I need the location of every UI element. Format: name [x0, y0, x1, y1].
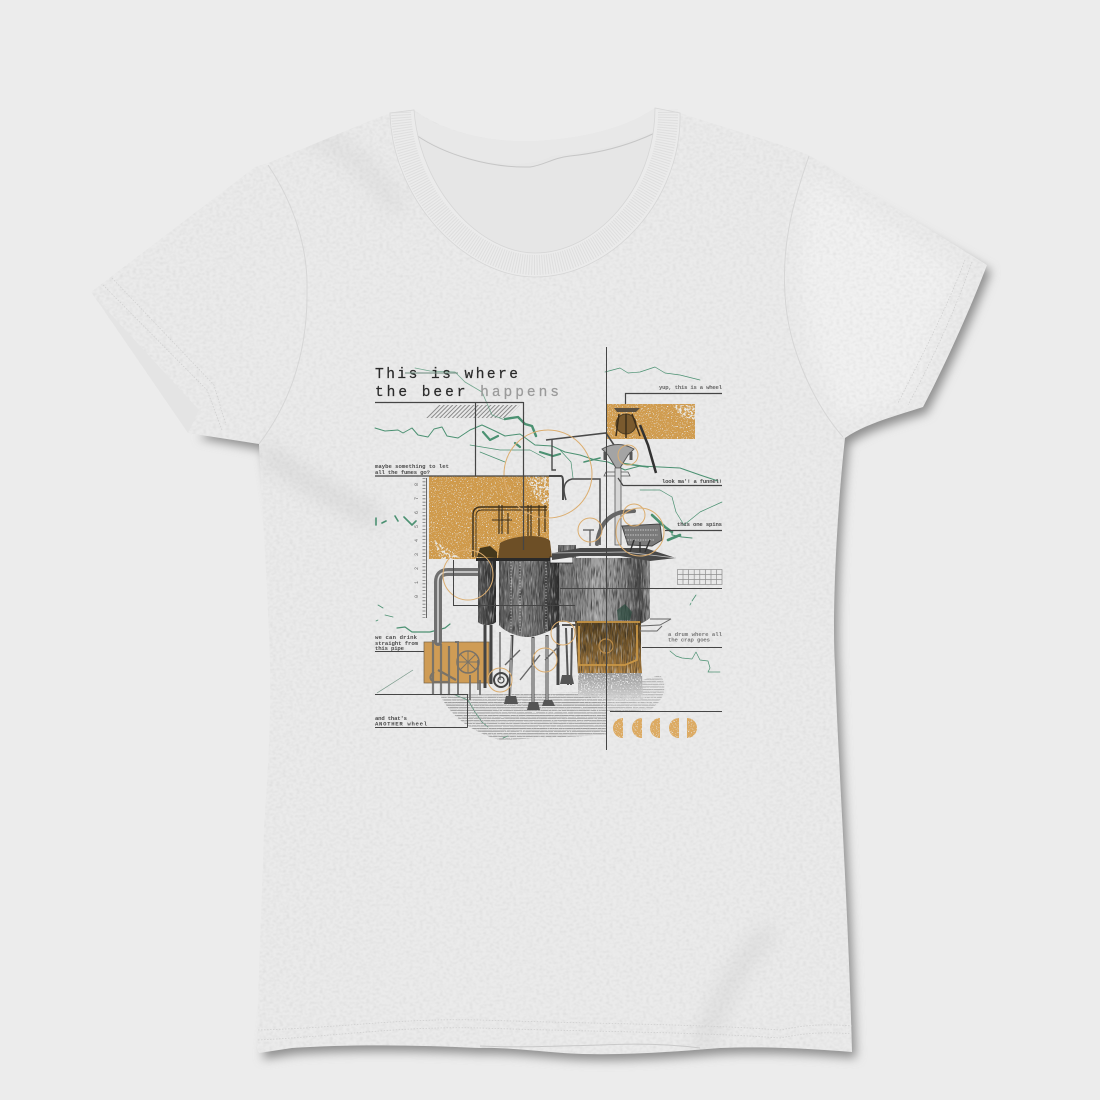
curved pipe to spinner	[597, 511, 634, 544]
label: funnel: look ma'! a funnel!	[662, 478, 722, 485]
small pot	[477, 546, 497, 558]
label: pipe line 3: this pipe	[375, 645, 405, 652]
fabric shading and texture	[94, 117, 982, 1054]
leg column right	[562, 625, 576, 685]
leg feet	[504, 675, 574, 710]
label: pipe: we can drink	[375, 634, 418, 641]
right tank green stain	[617, 604, 632, 620]
label: wheel: yup, this is a wheel	[659, 384, 723, 391]
main tank	[499, 560, 559, 637]
inside back of neck	[414, 108, 655, 255]
back neck band	[414, 108, 657, 164]
shirt body	[91, 108, 987, 1054]
label: another wheel: and that's	[375, 715, 408, 722]
top pipes over big ochre block	[473, 505, 547, 557]
label: spins: this one spins	[677, 521, 723, 528]
label: drum line 2: the crap goes	[668, 636, 711, 644]
ruler: 2	[414, 567, 420, 570]
label: drum: a drum where all	[668, 631, 723, 638]
back left tank	[478, 560, 496, 625]
ruler	[414, 478, 426, 618]
spinner device	[622, 524, 662, 552]
main tank dome	[498, 536, 552, 558]
ochre block: wheel	[607, 404, 695, 439]
print: beer brewery artwork	[375, 347, 723, 750]
ruler: 6	[414, 511, 420, 514]
title: the beer happens	[375, 385, 559, 401]
top platform left	[476, 558, 558, 561]
back middle tank	[558, 545, 576, 622]
guide lines	[375, 347, 722, 750]
label: pipe line 2: straight from	[375, 640, 419, 647]
wheel mechanism	[614, 408, 656, 473]
ruler: 4	[414, 539, 420, 542]
ruler: 3	[414, 553, 420, 556]
pump wheel	[494, 673, 508, 687]
right armhole seam	[784, 156, 843, 437]
platform bracket	[550, 557, 573, 563]
firebox	[575, 621, 642, 673]
main tank rivets	[511, 562, 546, 634]
pipe highlight	[438, 572, 482, 642]
funnel	[602, 444, 634, 545]
label: fumes: maybe something to let	[375, 463, 449, 470]
firebox side outlet	[640, 619, 671, 631]
half-moon row	[613, 718, 697, 738]
ochre block: lower left	[424, 642, 489, 683]
neck rib collar	[390, 108, 680, 277]
ochre block: large	[429, 476, 549, 559]
firebox base	[578, 673, 643, 700]
right tank	[573, 558, 650, 624]
green veins	[375, 367, 722, 738]
left sleeve cuff	[95, 297, 199, 433]
hatched bar	[424, 405, 520, 418]
ruler: 7	[414, 497, 420, 500]
ruler: 5	[414, 525, 420, 528]
worn patch on ochre blocks	[434, 405, 695, 559]
floor right haze	[606, 675, 664, 712]
label: another wheel line 2: ANOTHER wheel	[375, 720, 428, 728]
hem fold	[480, 1044, 700, 1048]
large curved pipe	[438, 572, 482, 642]
title: This is where	[375, 367, 518, 383]
collar ribs	[401, 110, 668, 265]
graph grid	[678, 570, 722, 584]
orange circles	[443, 430, 664, 692]
brewing machine	[430, 408, 676, 710]
back neck seam	[416, 132, 657, 167]
left armhole seam	[259, 165, 307, 444]
t-shirt	[93, 108, 996, 1067]
left cuff stitching	[103, 278, 226, 430]
label: fumes line 2: all the fumes go?	[375, 469, 431, 476]
ruler: 1	[414, 581, 420, 584]
small valve	[583, 530, 594, 546]
ruler: 8	[414, 483, 420, 486]
hem stitching	[258, 1020, 852, 1040]
tank legs	[478, 625, 560, 702]
floor engraving	[440, 692, 606, 740]
title	[375, 367, 559, 401]
connector pipes	[546, 433, 614, 545]
lower left wheel machinery	[430, 640, 480, 700]
shirt drop shadow	[199, 136, 991, 1060]
firebox door	[599, 639, 613, 653]
platform edge	[552, 552, 676, 558]
firebox ochre frame	[577, 622, 640, 665]
right tank platform	[552, 548, 676, 561]
ruler: 0	[414, 595, 420, 598]
right cuff stitching	[898, 260, 972, 405]
